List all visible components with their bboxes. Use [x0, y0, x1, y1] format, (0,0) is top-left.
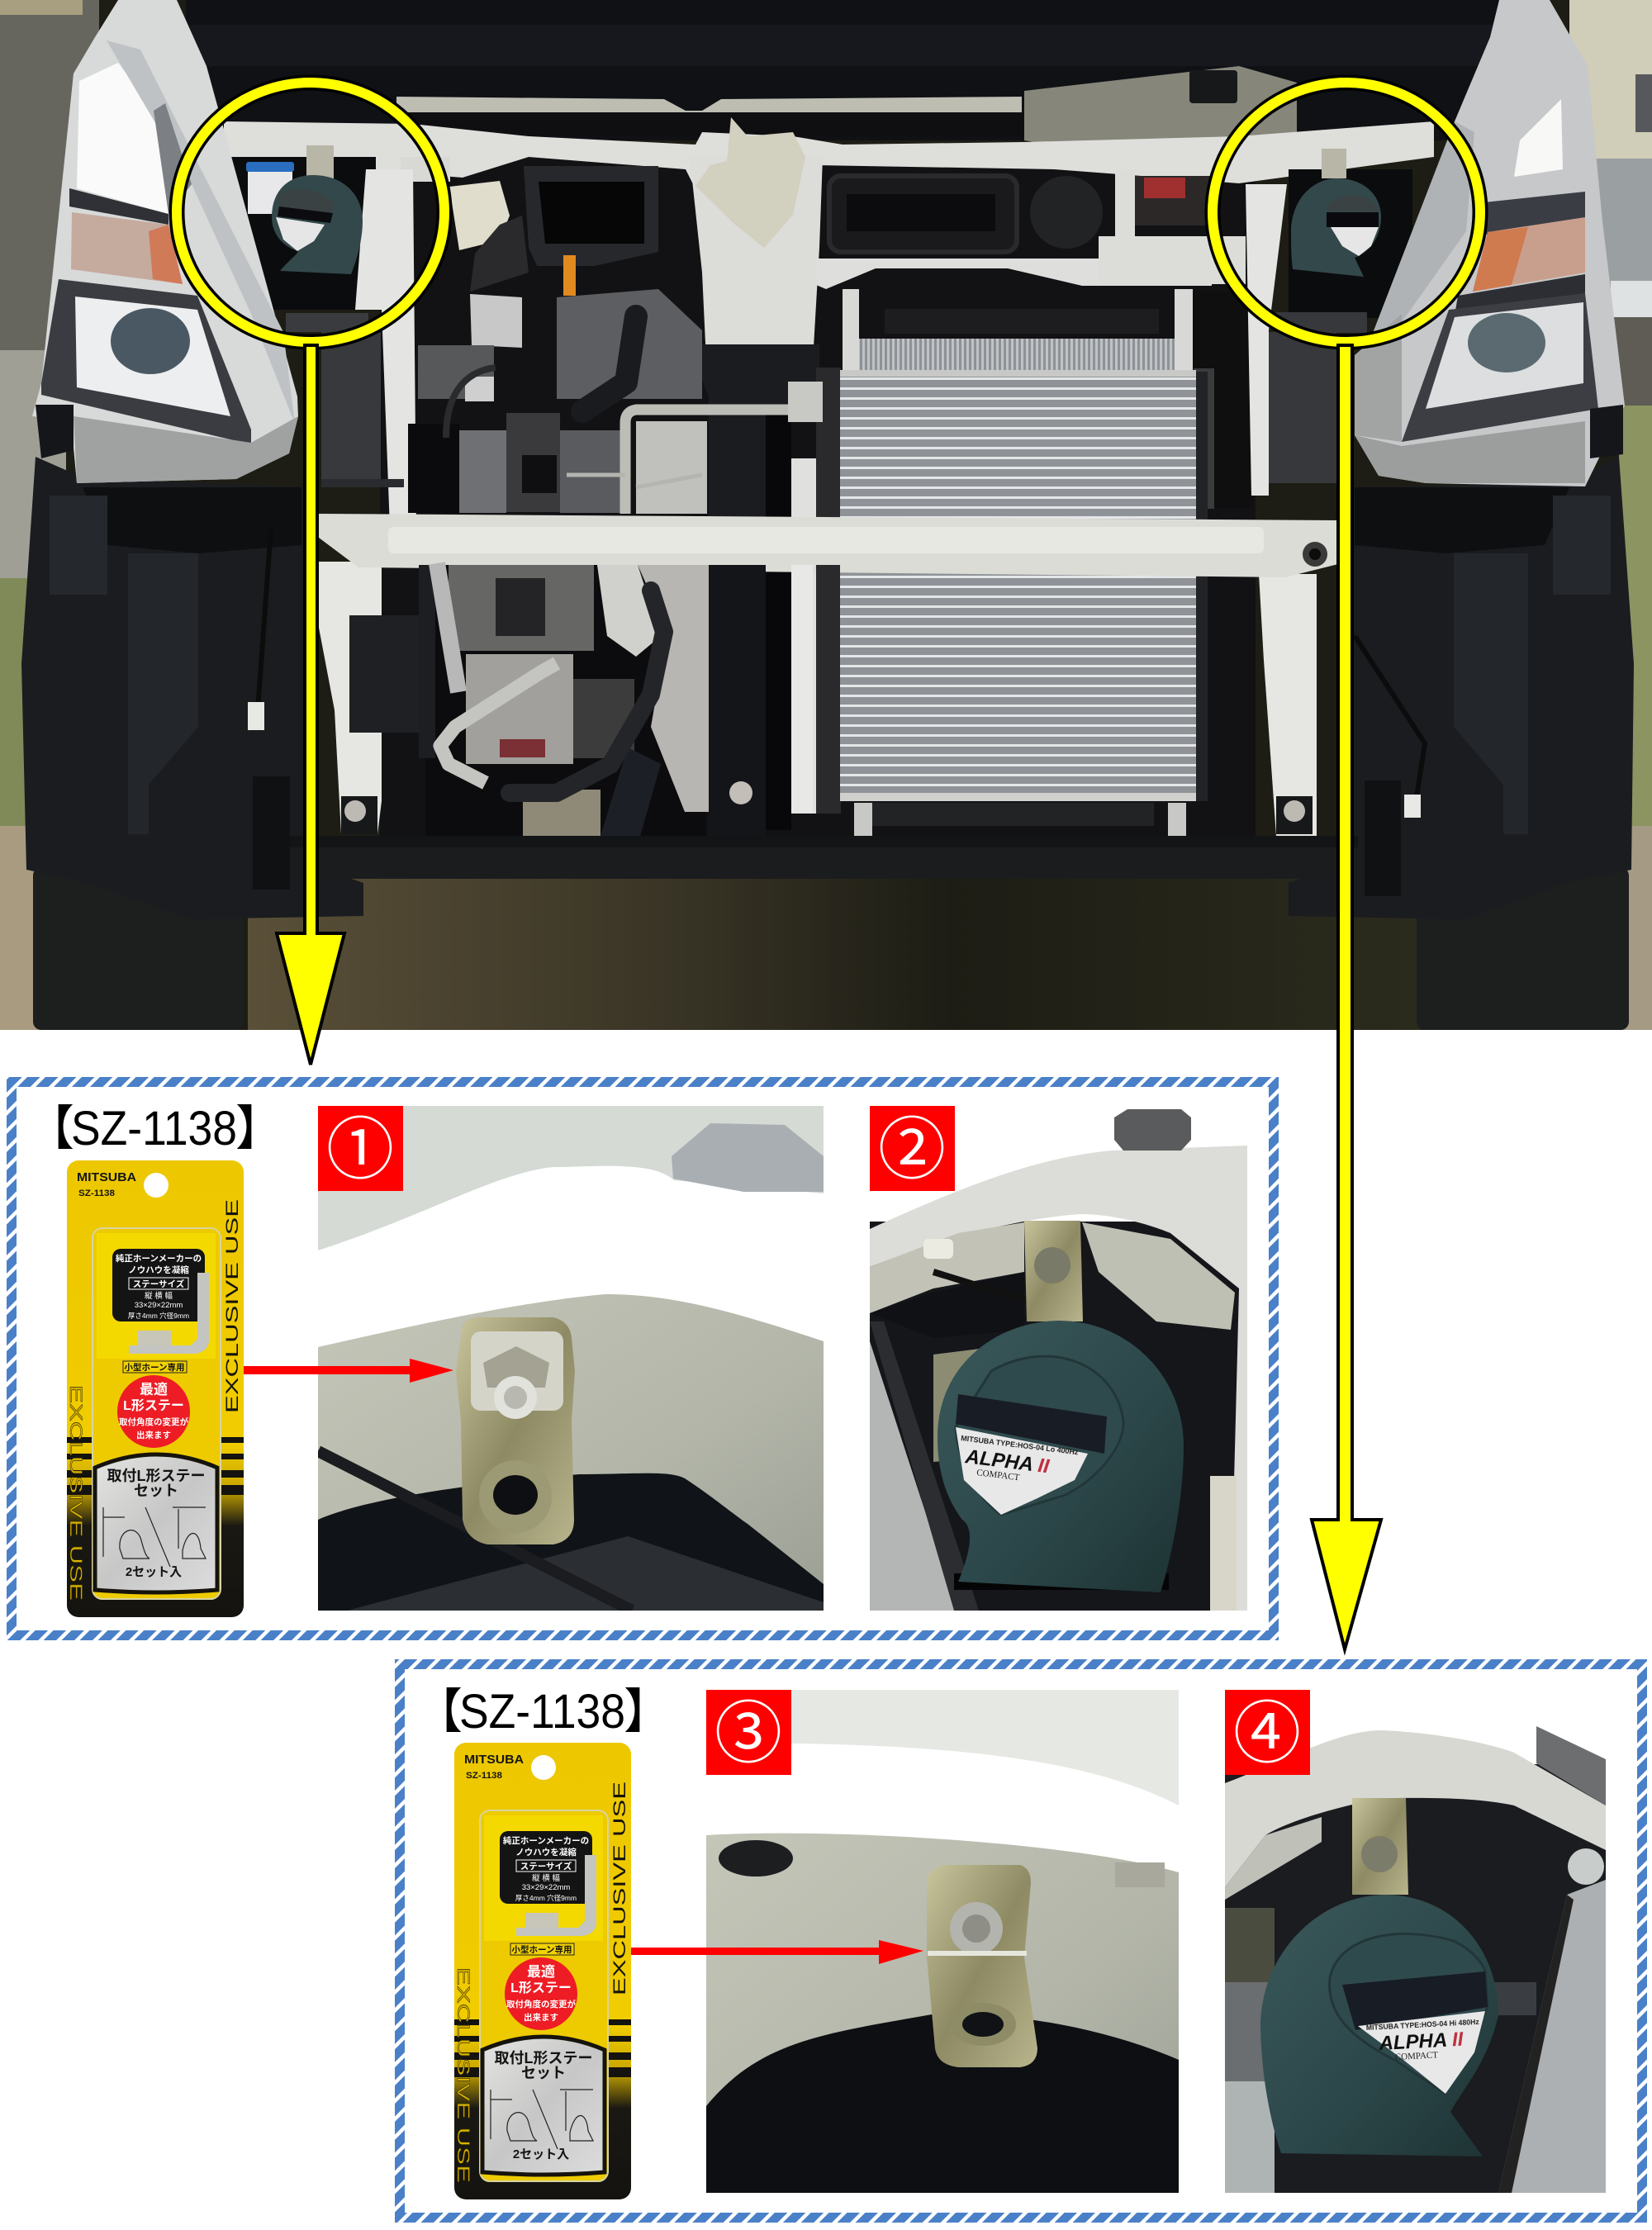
washer tank reservoir in bay	[449, 181, 510, 250]
right headlight	[1355, 0, 1625, 486]
product package: SZ-1138: 縦 横 幅	[145, 1291, 173, 1301]
center pillar and brace	[690, 157, 841, 830]
product package: SZ-1138: EXCLUSIVE USE	[223, 1199, 242, 1413]
product package: SZ-1138: 純正ホーンメーカーの	[503, 1835, 589, 1846]
right yellow ring highlighting horn	[1213, 83, 1480, 342]
panel: right side steps 3 and 4	[400, 1664, 1642, 2218]
product package: SZ-1138: EXCLUSIVE USE	[610, 1782, 629, 1995]
engine bay background	[380, 157, 1256, 838]
radiator	[840, 289, 1208, 839]
hood underside	[186, 0, 1499, 149]
left air intake duct	[524, 166, 658, 296]
ground under car	[248, 878, 1421, 1030]
product package: SZ-1138: SZ-1138	[78, 1189, 115, 1198]
product package: SZ-1138: SZ-1138	[466, 1771, 502, 1781]
part number label: 】	[624, 1672, 672, 1742]
upper crossmember	[224, 121, 1434, 186]
product package: SZ-1138: 取付L形ステー	[107, 1468, 205, 1484]
product package: SZ-1138: EXCLUSIVE USE	[66, 1385, 85, 1601]
product package: SZ-1138: 純正ホーンメーカーの	[116, 1253, 202, 1264]
photo step 4: horn mounted: ALPHA II	[1378, 2028, 1464, 2055]
product package: SZ-1138: 厚さ4mm 穴径9mm	[128, 1312, 189, 1320]
photo step 4: horn mounted: MITSUBA TYPE:HOS-04 Hi 480Hz	[1366, 2018, 1479, 2032]
background wall and ground at left	[0, 0, 99, 1030]
washer tank	[246, 162, 294, 214]
wires and connectors	[248, 529, 1425, 818]
yellow arrow: right horn to panel 2	[1312, 345, 1381, 1649]
part number label: 【	[26, 1089, 74, 1159]
product package: SZ-1138	[453, 1743, 631, 2199]
lower white bar	[319, 514, 1338, 577]
product package: SZ-1138: 33×29×22mm	[135, 1301, 183, 1310]
product package: SZ-1138: 出来ます	[136, 1430, 171, 1440]
part number label: SZ-1138	[71, 1102, 237, 1155]
photo step 4: horn mounted: COMPACT	[1395, 2050, 1439, 2062]
yellow arrow: left horn to panel 1	[277, 345, 344, 1065]
left headlight	[32, 0, 298, 483]
panel: left side steps 1 and 2	[12, 1082, 1274, 1635]
product package: SZ-1138: EXCLUSIVE USE	[453, 1967, 472, 2183]
bottom black bar	[253, 776, 1401, 896]
photo step 2: horn mounted: ALPHA II	[963, 1445, 1051, 1478]
product package: SZ-1138: 2セット入	[126, 1565, 182, 1579]
horn bays	[227, 157, 1412, 333]
bay details at right of radiator	[1193, 292, 1252, 509]
product package: SZ-1138: セット	[521, 2065, 566, 2081]
part number label: 】	[235, 1089, 283, 1159]
product package: SZ-1138: 取付L形ステー	[494, 2050, 593, 2066]
photo step 4: horn mounted	[1225, 1690, 1606, 2193]
left yellow ring highlighting horn	[177, 83, 444, 342]
part number label: SZ-1138	[459, 1685, 625, 1739]
product package: SZ-1138: ノウハウを凝縮	[515, 1847, 577, 1858]
product package: SZ-1138: 33×29×22mm	[522, 1883, 570, 1892]
photo step 3: L bracket	[706, 1690, 1179, 2193]
product package: SZ-1138: 取付角度の変更が	[119, 1416, 188, 1427]
number badge 1: ①	[326, 1094, 394, 1193]
number badge 2: ②	[878, 1094, 946, 1193]
product package: SZ-1138: L形ステー	[123, 1398, 184, 1413]
upper engine: air intake hose, throttle body	[408, 216, 823, 514]
product package: SZ-1138: 厚さ4mm 穴径9mm	[515, 1894, 577, 1902]
bumpers	[21, 457, 1634, 919]
product package: SZ-1138: セット	[134, 1483, 178, 1499]
hood latch	[695, 117, 805, 248]
product package: SZ-1138: 出来ます	[524, 2012, 558, 2023]
photo step 1: L bracket	[318, 1106, 824, 1611]
number badge 4: ④	[1233, 1678, 1301, 1777]
tires	[33, 867, 1629, 1030]
number badge 3: ③	[714, 1678, 782, 1777]
product package: SZ-1138: L形ステー	[510, 1981, 572, 1995]
product package: SZ-1138	[66, 1160, 244, 1617]
photo step 2: horn mounted: MITSUBA TYPE:HOS-04 Lo 400Hz	[961, 1434, 1079, 1456]
photo step 2: horn mounted: COMPACT	[976, 1468, 1020, 1483]
product package: SZ-1138: 取付角度の変更が	[506, 1999, 576, 2009]
background building and fence at right	[1569, 0, 1652, 1030]
product package: SZ-1138: ステーサイズ	[520, 1861, 572, 1872]
right air intake duct	[816, 169, 1246, 289]
right horn in photo	[1291, 178, 1381, 277]
part number label: 【	[415, 1672, 463, 1742]
product package: SZ-1138: 小型ホーン専用	[512, 1944, 572, 1955]
strut and tube below the bar	[709, 565, 840, 837]
product package: SZ-1138: 縦 横 幅	[532, 1873, 560, 1883]
product package: SZ-1138: 2セット入	[513, 2147, 569, 2161]
horn stays in photo	[306, 145, 1346, 178]
product package: SZ-1138: 小型ホーン専用	[125, 1362, 184, 1373]
main photo: engine bay of car	[0, 0, 1652, 1030]
product package: SZ-1138: 最適	[140, 1382, 168, 1397]
product package: SZ-1138: MITSUBA	[464, 1753, 524, 1767]
product package: SZ-1138: MITSUBA	[77, 1170, 136, 1184]
product package: SZ-1138: 最適	[527, 1964, 555, 1980]
side pillars	[319, 169, 1336, 836]
product package: SZ-1138: ステーサイズ	[133, 1279, 185, 1289]
arrow: package to bracket, step 3	[631, 1940, 923, 1964]
product package: SZ-1138: ノウハウを凝縮	[128, 1264, 189, 1275]
arrow: package to bracket, step 1	[244, 1359, 453, 1383]
left horn in photo	[272, 175, 363, 274]
lower engine: compressor, hoses, heat shield	[419, 563, 709, 837]
photo step 2: horn mounted	[870, 1106, 1247, 1611]
